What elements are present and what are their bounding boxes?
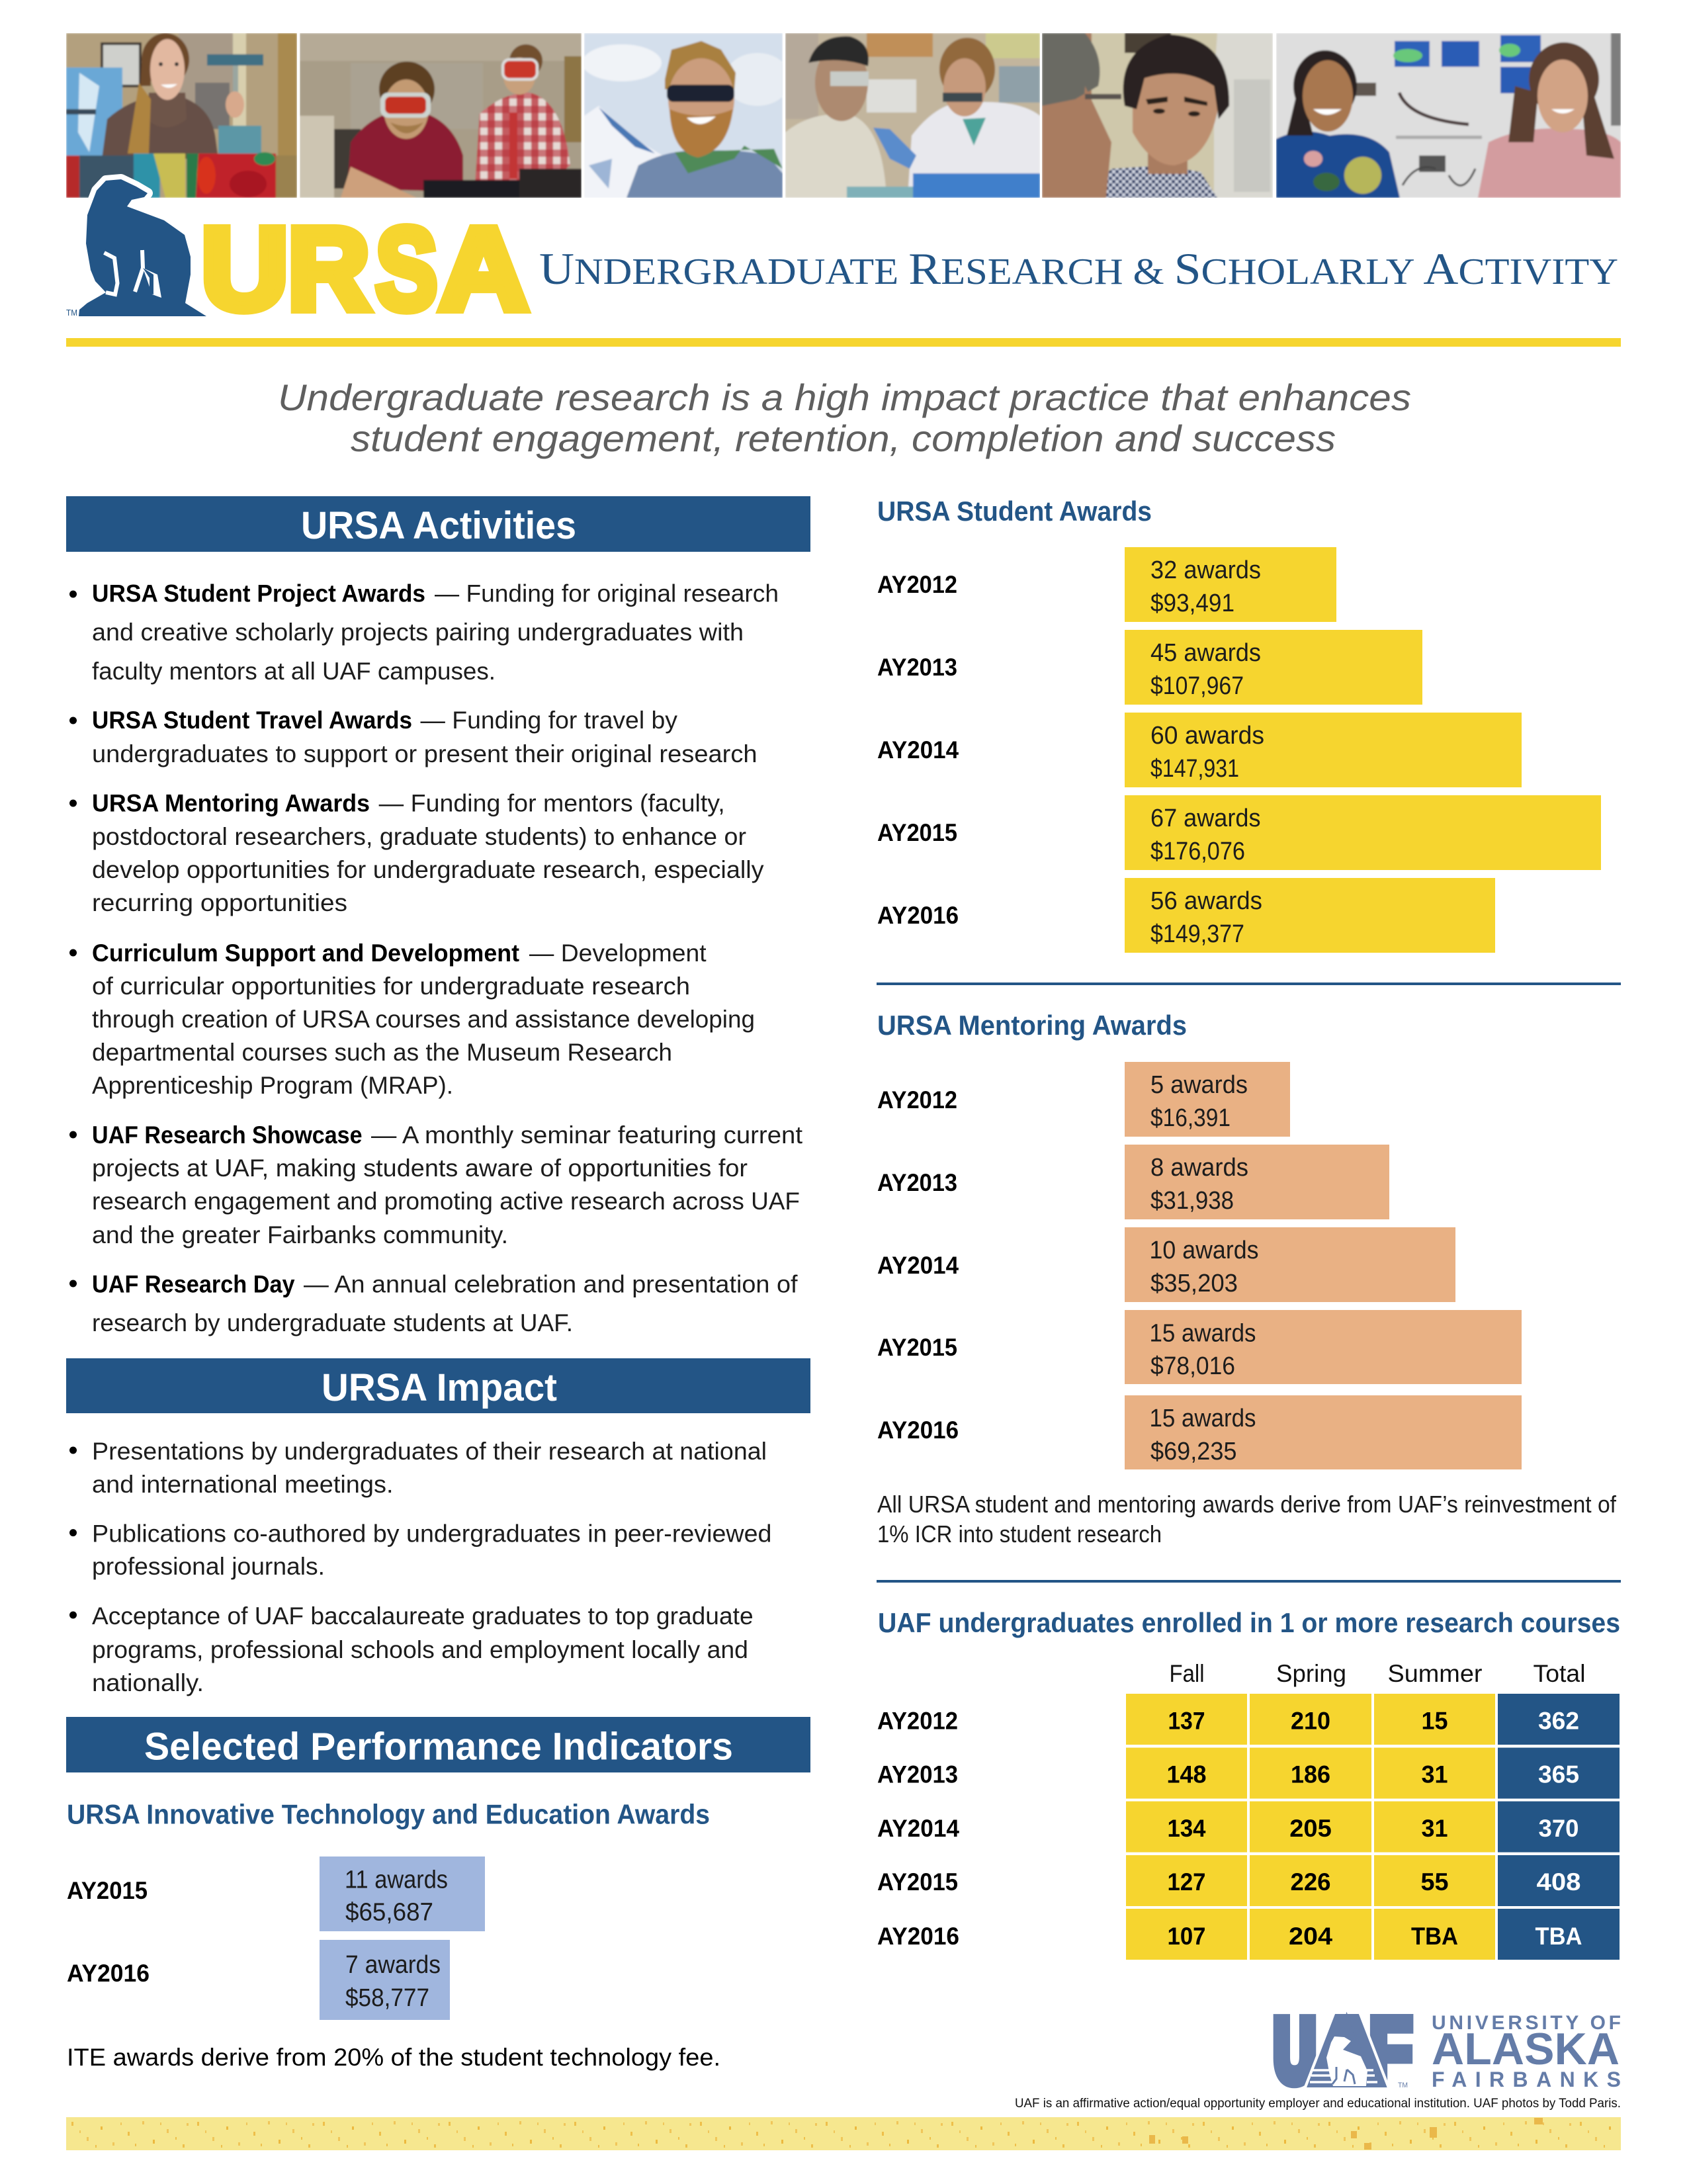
row: AY2012: AY2012 [877, 1707, 958, 1735]
bar: mentoring AY2016: 15 awards [1150, 1405, 1256, 1432]
logo mark: UAF with bear: F [1369, 1998, 1412, 2103]
bar: student AY2016: $149,377 [1150, 920, 1244, 948]
bar: ITE AY2015: $65,687 [345, 1899, 433, 1927]
note: funding source: All URSA student and mentoring awards derive from UAF’s reinvestment of [877, 1491, 1617, 1518]
row: AY2015 [877, 1855, 1620, 1906]
logo mark: UAF with bear: A [1311, 1998, 1383, 2103]
logo mark: UAF with bear: A [1311, 1998, 1383, 2103]
icon: polar bear [66, 179, 206, 318]
photo: man with sunglasses on a mountain [582, 33, 791, 198]
row: AY2012: 210 [1291, 1707, 1330, 1735]
item: Mentoring Awards: postdoctoral researchers, graduate students) to enhance or [92, 823, 746, 850]
bar: mentoring AY2015: AY2015 [877, 1334, 957, 1361]
wordmark: URSA: A [439, 204, 528, 334]
bar: mentoring AY2013: AY2013 [877, 1169, 957, 1196]
item: Student Project Awards [69, 580, 779, 685]
row: AY2012: 362 [1538, 1707, 1579, 1735]
row: AY2015: 55 [1421, 1868, 1449, 1896]
row: AY2014 [877, 1802, 1620, 1853]
footer band [66, 2117, 1621, 2150]
item: Mentoring Awards: develop opportunities for undergraduate research, especially [92, 856, 764, 883]
item: Student Travel Awards: — Funding for travel by [421, 707, 678, 734]
photo: two students with research poster [1276, 33, 1621, 198]
item: Mentoring Awards: recurring opportunities [92, 889, 347, 916]
bar: student AY2015 [877, 795, 1601, 870]
bar: student AY2016: AY2016 [877, 902, 959, 929]
note: ITE funding: ITE awards derive from 20% of the student technology fee. [67, 2044, 720, 2071]
row: AY2014: 205 [1289, 1815, 1332, 1842]
bar: ITE AY2015: AY2015 [67, 1877, 148, 1904]
photo: lab researchers [785, 33, 1040, 198]
photo: two students in laser goggles [300, 33, 582, 198]
item: Curriculum Support: departmental courses such as the Museum Research [92, 1039, 672, 1066]
bar: mentoring AY2012: $16,391 [1150, 1104, 1231, 1132]
item: Mentoring Awards: — Funding for mentors (faculty, [379, 789, 725, 816]
row: AY2015: 226 [1290, 1868, 1331, 1896]
photo: mentor and student at a poster [1042, 33, 1273, 198]
note: funding source: 1% ICR into student research [877, 1520, 1162, 1548]
bar: mentoring AY2015: 15 awards [1150, 1319, 1256, 1347]
item: Student Project Awards: URSA Student Project Awards [92, 580, 425, 607]
item: Research Showcase: and the greater Fairbanks community. [92, 1221, 508, 1248]
row: AY2016: TBA [1535, 1923, 1582, 1950]
row: AY2015: AY2015 [877, 1868, 958, 1896]
item: presentations [69, 1438, 767, 1498]
row: AY2013 [877, 1748, 1620, 1798]
bar: mentoring AY2015: $78,016 [1150, 1352, 1235, 1380]
bar: student AY2012: $93,491 [1150, 590, 1234, 617]
logo text: UNIVERSITY OF [1432, 2012, 1621, 2034]
item: Research Day: UAF Research Day [92, 1270, 295, 1298]
item: Mentoring Awards [69, 789, 764, 916]
bar: student AY2013: $107,967 [1150, 672, 1244, 700]
heading: Selected Performance Indicators [66, 1717, 810, 1772]
heading: Selected Performance Indicators: Selected Performance Indicators [144, 1725, 733, 1768]
bar: student AY2014 [877, 713, 1522, 787]
item: publications [69, 1520, 771, 1580]
logo text: ALASKA [1432, 2024, 1620, 2074]
item: Research Showcase [69, 1121, 803, 1248]
row: AY2014: 370 [1539, 1815, 1579, 1842]
bar: student AY2012 [877, 547, 1336, 622]
item: Student Travel Awards: URSA Student Travel Awards [92, 707, 412, 734]
item: Student Travel Awards [69, 707, 757, 767]
item: Curriculum Support: — Development [529, 939, 707, 967]
bar: student AY2014: 60 awards [1150, 722, 1264, 750]
bar: ITE AY2016: AY2016 [67, 1960, 150, 1987]
item: Curriculum Support [69, 939, 755, 1099]
item: presentations: Presentations by undergraduates of their research at national [92, 1438, 767, 1465]
row: AY2014: 31 [1421, 1815, 1448, 1842]
panel: Selected Performance Indicators [66, 1717, 810, 2071]
item: Curriculum Support: Apprenticeship Program (MRAP). [92, 1072, 453, 1099]
row: AY2016: TBA [1411, 1923, 1458, 1950]
title: Undergraduate Research & Scholarly Activity: UNDERGRADUATE RESEARCH & SCHOLARLY ACTIVITY [539, 243, 1618, 294]
bar: student AY2013: AY2013 [877, 654, 957, 681]
item: Curriculum Support: through creation of URSA courses and assistance developing [92, 1006, 755, 1033]
tagline: student engagement, retention, completion and success [351, 417, 1336, 459]
table header row [1170, 1660, 1585, 1687]
heading: URSA Student Awards: URSA Student Awards [877, 496, 1152, 527]
logo: University of Alaska Fairbanks [1274, 1998, 1621, 2103]
bar: mentoring AY2013: 8 awards [1150, 1154, 1248, 1182]
photo: artist with paintings [66, 33, 297, 198]
bar: student AY2013: 45 awards [1150, 639, 1261, 667]
wordmark: URSA: R [288, 204, 370, 334]
row: AY2013: AY2013 [877, 1761, 958, 1788]
bar: mentoring AY2014: $35,203 [1150, 1270, 1238, 1297]
item: Research Day [69, 1270, 798, 1336]
wordmark: URSA: S [376, 204, 437, 334]
bar: student AY2014: AY2014 [877, 736, 959, 764]
bar: student AY2016: 56 awards [1150, 887, 1262, 915]
chart: URSA Mentoring Awards [877, 1010, 1617, 1548]
item: Research Showcase: projects at UAF, making students aware of opportunities for [92, 1155, 748, 1182]
item: Student Travel Awards: undergraduates to support or present their original research [92, 740, 757, 767]
logo mark: UAF with bear: U [1274, 2002, 1315, 2099]
bar: ITE AY2015 [67, 1856, 485, 1931]
subheading: Innovative Technology and Education Awards: URSA Innovative Technology and Education Awards [67, 1798, 710, 1830]
table header row: Fall [1170, 1660, 1204, 1687]
row: AY2012: 137 [1168, 1707, 1205, 1735]
item: presentations: and international meetings. [92, 1471, 393, 1498]
bar: mentoring AY2013: $31,938 [1150, 1187, 1234, 1215]
bar: ITE AY2015: 11 awards [345, 1866, 448, 1894]
item: Curriculum Support: of curricular opportunities for undergraduate research [92, 973, 690, 1000]
tagline [278, 376, 1411, 459]
item: publications: Publications co-authored by undergraduates in peer-reviewed [92, 1520, 771, 1547]
row: AY2014: AY2014 [877, 1815, 959, 1842]
bar: student AY2012: 32 awards [1150, 556, 1261, 584]
yellow header rule [66, 338, 1621, 347]
bar: mentoring AY2012: 5 awards [1150, 1071, 1248, 1099]
item: Curriculum Support: Curriculum Support and Development [92, 939, 519, 967]
tagline: Undergraduate research is a high impact practice that enhances [278, 376, 1411, 418]
footer note: UAF is an affirmative action/equal opportunity employer and educational institution. UAF photos by Todd Paris. [1015, 2097, 1621, 2111]
item: Research Day: research by undergraduate students at UAF. [92, 1309, 573, 1336]
bar: mentoring AY2013 [877, 1145, 1389, 1219]
row: AY2012 [877, 1694, 1620, 1745]
item: graduate acceptance: Acceptance of UAF baccalaureate graduates to top graduate [92, 1602, 754, 1630]
logo mark: UAF with bear [1274, 1998, 1412, 2103]
logo text: FAIRBANKS [1432, 2068, 1621, 2091]
heading: URSA Mentoring Awards: URSA Mentoring Awards [877, 1010, 1187, 1041]
logo: URSA bear and wordmark [66, 179, 528, 334]
row: AY2013: 31 [1421, 1761, 1448, 1788]
table header row: Total [1534, 1660, 1585, 1687]
row: AY2013: 148 [1167, 1761, 1207, 1788]
bar: mentoring AY2014 [877, 1227, 1455, 1302]
row: AY2012: 15 [1421, 1707, 1448, 1735]
row: AY2016: AY2016 [877, 1923, 959, 1950]
logo text [1432, 2012, 1621, 2091]
table header row: Spring [1276, 1660, 1346, 1687]
item: Research Day: — An annual celebration and presentation of [304, 1270, 798, 1298]
icon: polar bear: TM [66, 308, 77, 318]
bar: mentoring AY2014: 10 awards [1150, 1237, 1258, 1264]
wordmark: URSA: U [201, 204, 288, 334]
table header row: Summer [1388, 1660, 1482, 1687]
row: AY2013: 186 [1291, 1761, 1330, 1788]
row: AY2016: 107 [1167, 1923, 1205, 1950]
table: undergraduates in research courses [877, 1607, 1620, 1960]
item: Mentoring Awards: URSA Mentoring Awards [92, 789, 370, 816]
row: AY2015: 408 [1536, 1868, 1581, 1896]
note: funding source [877, 1491, 1617, 1548]
item: Research Showcase: research engagement and promoting active research across UAF [92, 1188, 800, 1215]
heading: enrolled in research courses: UAF undergraduates enrolled in 1 or more research courses [878, 1607, 1620, 1638]
logo mark: UAF with bear: TM [1398, 2081, 1408, 2089]
row: AY2013: 365 [1538, 1761, 1579, 1788]
bar: mentoring AY2012 [877, 1062, 1290, 1137]
bar: student AY2015: 67 awards [1150, 805, 1261, 832]
item: Student Project Awards: and creative scholarly projects pairing undergraduates with [92, 619, 744, 646]
bar: student AY2014: $147,931 [1150, 755, 1239, 783]
bar: student AY2015: AY2015 [877, 819, 957, 846]
row: AY2016 [877, 1909, 1620, 1960]
heading: URSA Activities [66, 496, 810, 552]
item: Student Project Awards: — Funding for original research [435, 580, 779, 607]
bar: student AY2015: $176,076 [1150, 838, 1245, 865]
bar: ITE AY2016 [67, 1940, 450, 2020]
heading: URSA Impact: URSA Impact [322, 1366, 557, 1409]
bar: mentoring AY2016: AY2016 [877, 1417, 959, 1444]
bar: mentoring AY2012: AY2012 [877, 1086, 957, 1114]
item: Research Showcase: — A monthly seminar featuring current [371, 1121, 803, 1149]
item: graduate acceptance: programs, professional schools and employment locally and [92, 1636, 748, 1663]
bar: ITE AY2016: 7 awards [345, 1951, 441, 1979]
chart: URSA Student Awards [877, 496, 1601, 953]
bar: student AY2012: AY2012 [877, 571, 957, 598]
bar: student AY2013 [877, 630, 1422, 705]
bar: mentoring AY2016 [877, 1395, 1522, 1469]
heading: URSA Activities: URSA Activities [301, 504, 576, 547]
panel: URSA Activities [66, 496, 810, 1336]
item: Research Showcase: UAF Research Showcase [92, 1121, 363, 1149]
item: Student Project Awards: faculty mentors at all UAF campuses. [92, 658, 496, 685]
bar: mentoring AY2015 [877, 1310, 1522, 1384]
bar: ITE AY2016: $58,777 [345, 1984, 429, 2012]
heading: URSA Impact [66, 1358, 810, 1413]
row: AY2016: 204 [1289, 1923, 1332, 1950]
wordmark: URSA [201, 204, 528, 334]
bar: mentoring AY2016: $69,235 [1150, 1438, 1237, 1465]
bar: student AY2016 [877, 878, 1495, 953]
item: graduate acceptance [69, 1602, 754, 1696]
photo strip [66, 33, 1621, 198]
panel: URSA Impact [66, 1358, 810, 1696]
item: publications: professional journals. [92, 1553, 325, 1580]
row: AY2014: 134 [1167, 1815, 1206, 1842]
row: AY2015: 127 [1167, 1868, 1205, 1896]
bar: mentoring AY2014: AY2014 [877, 1252, 959, 1279]
item: graduate acceptance: nationally. [92, 1669, 204, 1696]
